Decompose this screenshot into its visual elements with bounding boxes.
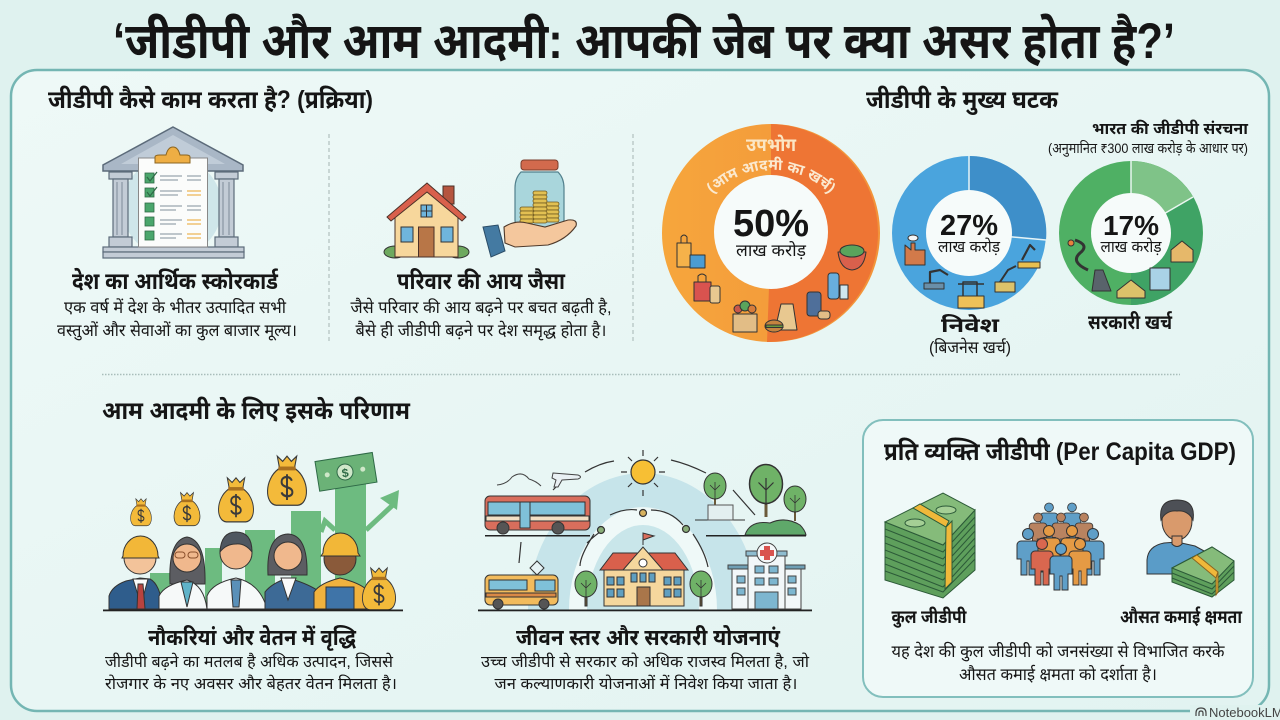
label: investment [929,313,1011,357]
arrows: flow around the scene [519,460,755,567]
label: government spending: सरकारी खर्च [1088,310,1173,334]
label: average earning capacity: औसत कमाई क्षमता [1120,606,1242,627]
icon group: public works [1068,240,1193,298]
donut: investment 27% [892,156,1046,310]
icon: red bus [485,496,590,534]
block: living standards and schemes: जन कल्याणकारी योजनाओं में निवेश किया जाता है। [494,674,798,693]
people: five workers [109,532,367,609]
block: like family income: जैसे परिवार की आय बढ़ने पर बचत बढ़ती है, [350,298,612,317]
icon: airplane [552,473,580,487]
block: jobs and wage growth: रोजगार के नए अवसर और बेहतर वेतन मिलता है। [105,674,397,693]
donut: consumption 50%: उपभोग [746,135,797,155]
block: living standards and schemes [481,625,810,693]
block: like family income: बैसे ही जीडीपी बढ़ने पर देश समृद्ध होता है। [356,321,606,341]
donut: investment 27%: लाख करोड़ [938,238,1000,256]
illustration: jobs and wages [103,452,403,611]
caption: composition of India GDP: भारत की जीडीपी संरचना [1092,119,1248,138]
block: living standards and schemes: जीवन स्तर और सरकारी योजनाएं [516,625,781,650]
donut: consumption 50% [662,124,880,342]
icon group: industry [905,235,1040,308]
panel: per capita GDP [863,420,1253,697]
heading: consequences: आम आदमी के लिए इसके परिणाम [102,396,411,425]
heading: GDP components: जीडीपी के मुख्य घटक [866,85,1059,115]
block: jobs and wage growth: जीडीपी बढ़ने का मतलब है अधिक उत्पादन, जिससे [105,652,394,671]
donut: consumption 50%: लाख करोड़ [736,242,806,260]
donut: government spending 17%: लाख करोड़ [1100,238,1162,256]
icon: individual with cash [1147,500,1234,597]
icon: banknote [315,452,377,491]
block: jobs and wage growth: नौकरियां और वेतन में वृद्धि [148,625,357,651]
arrow: growth [321,503,395,532]
text block: explanation: औसत कमाई क्षमता को दर्शाता है। [959,663,1157,684]
caption: composition of India GDP: (अनुमानित ₹300 लाख करोड़ के आधार पर) [1048,139,1248,158]
icon: trees and park [695,464,806,536]
icon: sun [621,450,665,496]
bar chart: rising growth [150,482,366,610]
block: economic scorecard: एक वर्ष में देश के भीतर उत्पादित सभी [64,298,287,317]
heading: per capita GDP: प्रति व्यक्ति जीडीपी (Per Capita GDP) [884,437,1236,466]
icon group: consumer goods [677,235,866,332]
illustration: living standards and public services [478,450,812,611]
block: jobs and wage growth [105,625,397,693]
block: economic scorecard [57,268,297,341]
icon: banknote: $ [341,466,350,480]
icon: house [384,183,469,258]
icon: crowd of population [1017,503,1104,590]
donut: consumption 50%: (आम आदमी का खर्च) [707,156,835,194]
label: investment: (बिजनेस खर्च) [929,338,1011,357]
icon: hospital [728,543,805,609]
block: like family income [350,268,612,341]
block: economic scorecard: देश का आर्थिक स्कोरकार्ड [72,268,279,294]
donut: government spending 17%: 17% [1103,210,1159,241]
donut: investment 27%: 27% [940,210,998,242]
icon: bank with scorecard [103,127,244,258]
text block: explanation: यह देश की कुल जीडीपी को जनसंख्या से विभाजित करके [892,640,1225,663]
label: total GDP: कुल जीडीपी [892,606,967,629]
block: economic scorecard: वस्तुओं और सेवाओं का कुल बाजार मूल्य। [57,321,297,341]
icon: money bags [131,456,306,526]
caption: composition of India GDP [1048,119,1248,158]
icon: total GDP cash stack [885,493,975,598]
icon: yellow bus [485,561,558,609]
icon: savings jar in hand [483,160,576,257]
block: like family income: परिवार की आय जैसा [397,268,566,294]
donut: government spending 17% [1059,161,1203,305]
heading: how GDP works: जीडीपी कैसे काम करता है? (प्रक्रिया) [48,85,373,114]
text block: explanation [892,640,1225,684]
icon: school [575,533,712,606]
label: investment: निवेश [941,313,1000,337]
donut: consumption 50%: 50% [733,203,809,245]
block: living standards and schemes: उच्च जीडीपी से सरकार को अधिक राजस्व मिलता है, जो [481,652,810,671]
